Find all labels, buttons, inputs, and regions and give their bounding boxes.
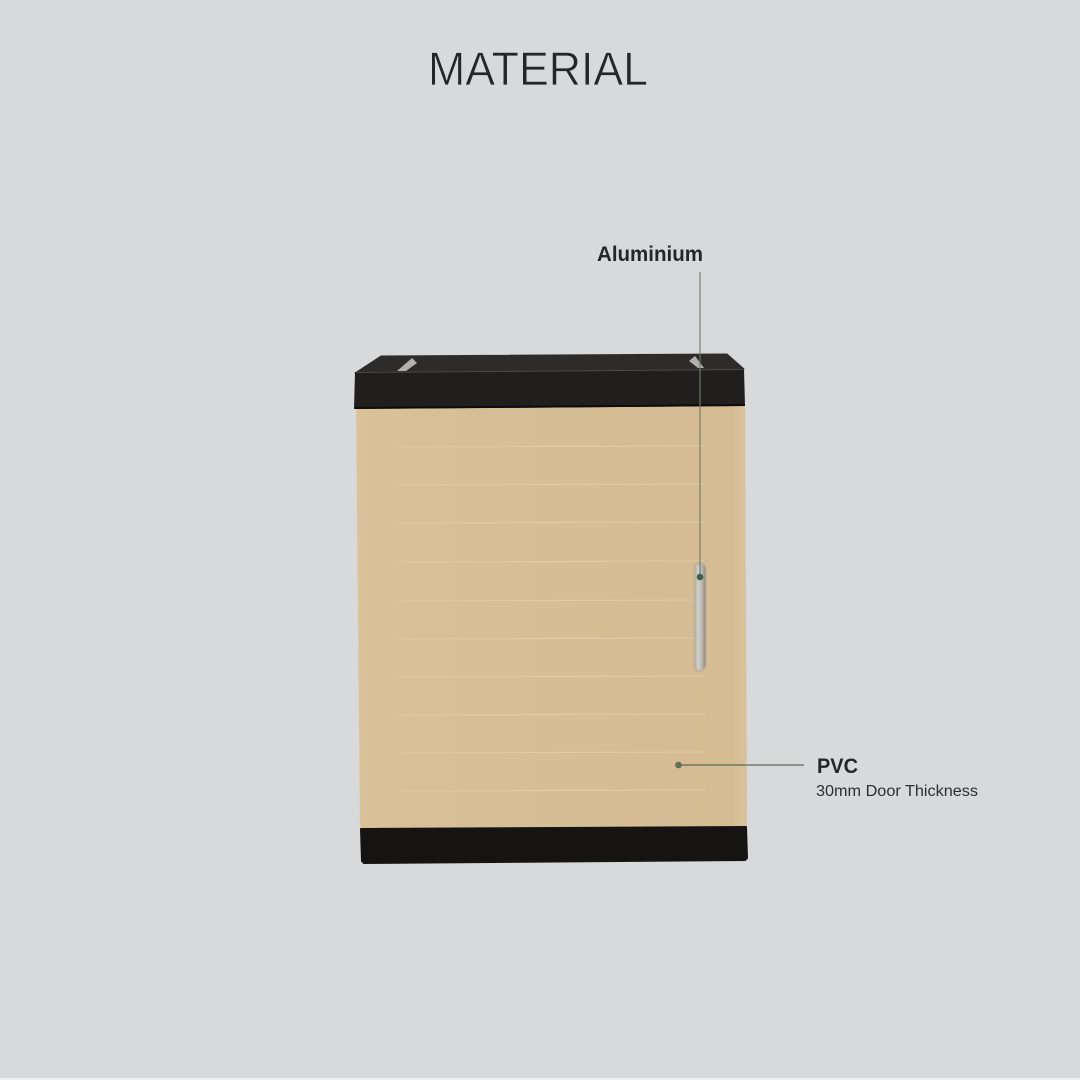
text: door thickness: 30mm Door Thickness <box>816 783 978 800</box>
leader line: PVC <box>679 764 804 766</box>
label: PVC: PVC <box>817 755 858 778</box>
leader line: aluminium <box>699 272 701 577</box>
cabinet product image <box>354 354 747 863</box>
cabinet bottom base <box>361 827 747 863</box>
marker: aluminium <box>697 574 703 580</box>
cabinet top lid <box>354 354 745 409</box>
door handle <box>694 562 706 672</box>
marker: PVC <box>675 762 682 768</box>
top bracket left <box>397 358 417 371</box>
callout: PVC <box>675 755 978 800</box>
top bracket right <box>689 356 704 368</box>
callout: aluminium <box>597 243 703 580</box>
title: MATERIAL <box>428 42 648 95</box>
cabinet door <box>356 403 747 830</box>
label: aluminium: Aluminium <box>597 243 703 266</box>
